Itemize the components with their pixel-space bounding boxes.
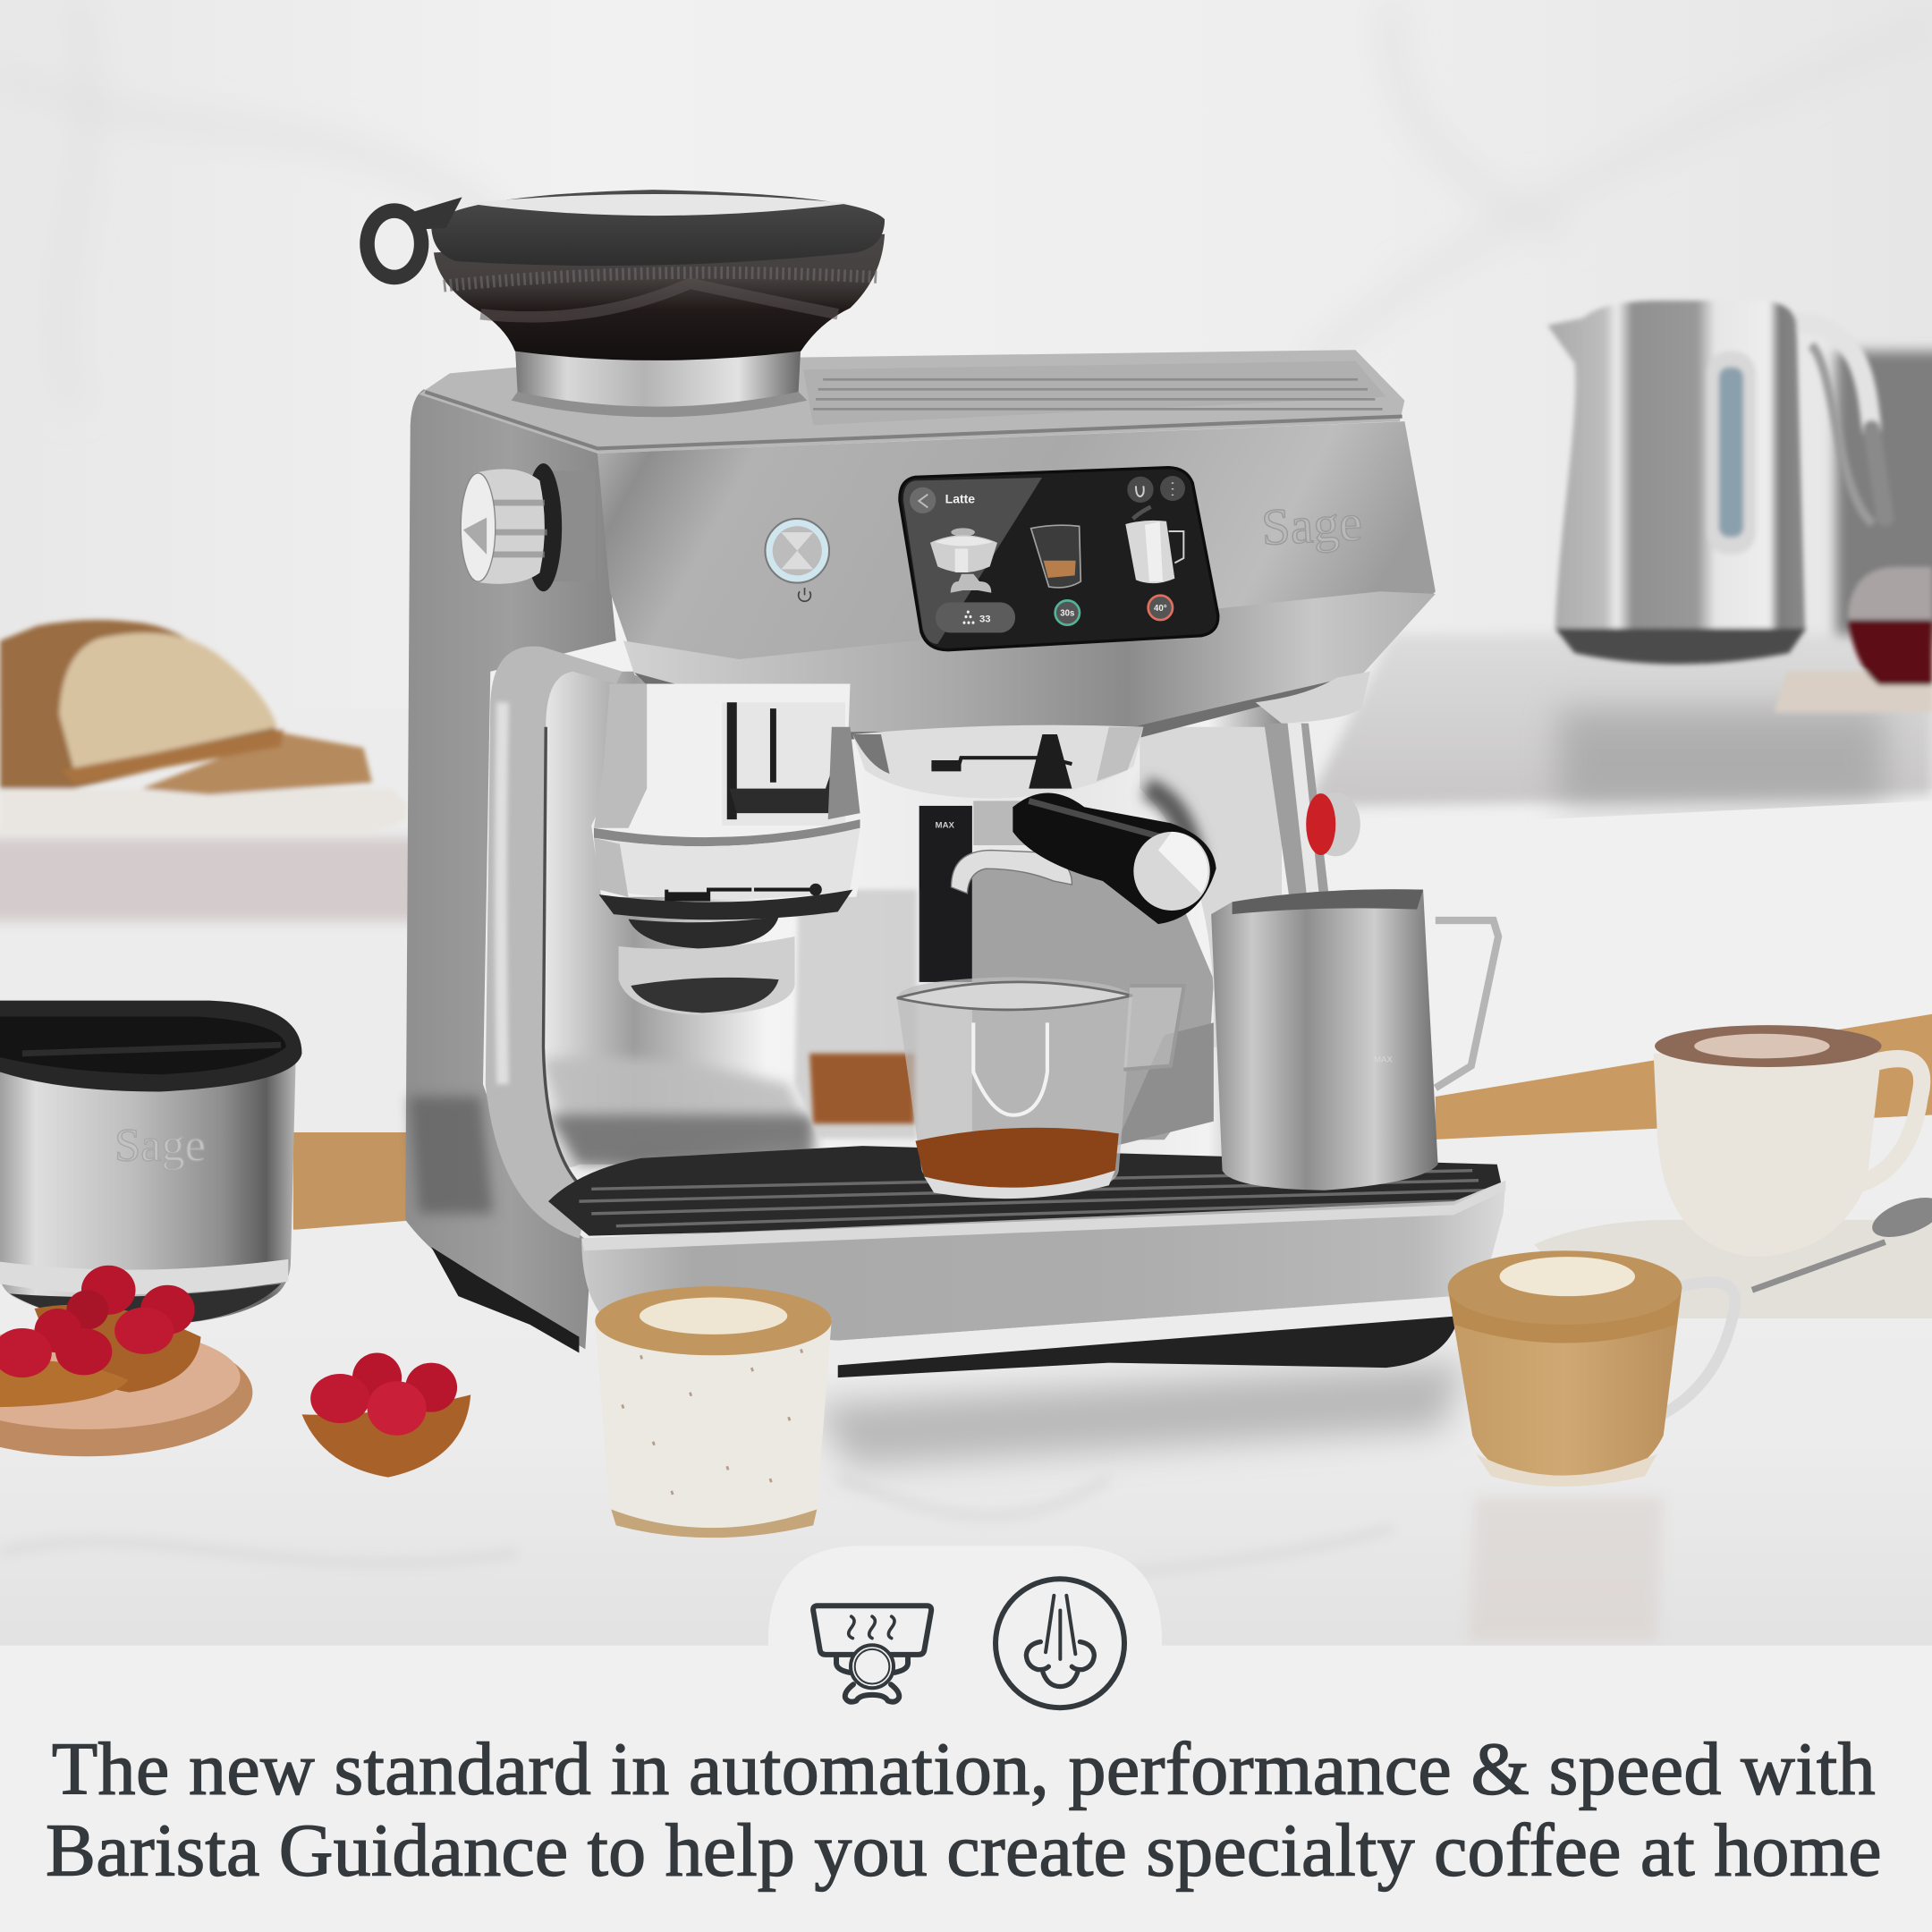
back-right cup on board [1534, 1025, 1932, 1318]
logo on knock box: Sage [114, 1120, 206, 1172]
hopper lid [431, 190, 885, 266]
foreground marble counter [0, 1115, 1932, 1651]
teapot glass and board [1775, 567, 1932, 712]
machine head [597, 421, 1436, 730]
power button [765, 519, 829, 601]
chrome frame arch [486, 647, 623, 1238]
chrome interior [546, 672, 1282, 1167]
bottom caption band [0, 1546, 1932, 1932]
icon: portafilter with aroma [813, 1606, 931, 1702]
drip tray [548, 1146, 1505, 1377]
knock box [0, 1001, 302, 1325]
coffee machine [405, 350, 1505, 1377]
background wall [0, 0, 1932, 789]
group head and portafilter [852, 725, 1216, 924]
milk jug [1211, 889, 1498, 1191]
machine feet [431, 1247, 579, 1353]
icon: nose with scent [996, 1579, 1124, 1707]
white speckled cup [595, 1286, 832, 1538]
reflections of cups [1469, 1497, 1664, 1641]
touch screen: 40° [1154, 604, 1167, 614]
dose control chrome unit [591, 684, 862, 1015]
max label: MAX [936, 821, 955, 831]
grind knob [461, 463, 595, 591]
touch screen: Latte [945, 491, 975, 505]
screen jug [1125, 507, 1183, 583]
hopper collar [515, 345, 801, 414]
reflected glass cup [795, 890, 917, 1139]
hopper bowl [434, 234, 885, 360]
espresso glass cup [897, 977, 1184, 1199]
brand logo: Sage [1260, 493, 1363, 556]
bread on board [0, 620, 407, 835]
latte glass [1448, 1250, 1735, 1487]
spoon [1752, 1242, 1885, 1290]
plate of tarts [0, 1266, 252, 1456]
top plate [419, 350, 1404, 453]
caption headline: Barista Guidance to help you create specialty coffee at home [46, 1809, 1882, 1893]
screen portafilter [930, 528, 997, 593]
screen glass [1031, 525, 1080, 588]
caption headline [46, 1728, 1882, 1893]
grinder hopper [360, 190, 885, 417]
touch screen: 33 [979, 614, 991, 624]
back counter [0, 634, 1932, 1233]
touch screen [900, 468, 1218, 650]
caption headline: The new standard in automation, performance & speed with [52, 1728, 1876, 1811]
machine side body [405, 389, 616, 1349]
touch screen: 30s [1060, 609, 1074, 619]
steam wand and red dial [1256, 672, 1370, 911]
hopper ring tab [360, 203, 428, 284]
kettle [1547, 301, 1885, 664]
single tart [302, 1353, 470, 1478]
jug scale: MAX [1374, 1055, 1393, 1064]
